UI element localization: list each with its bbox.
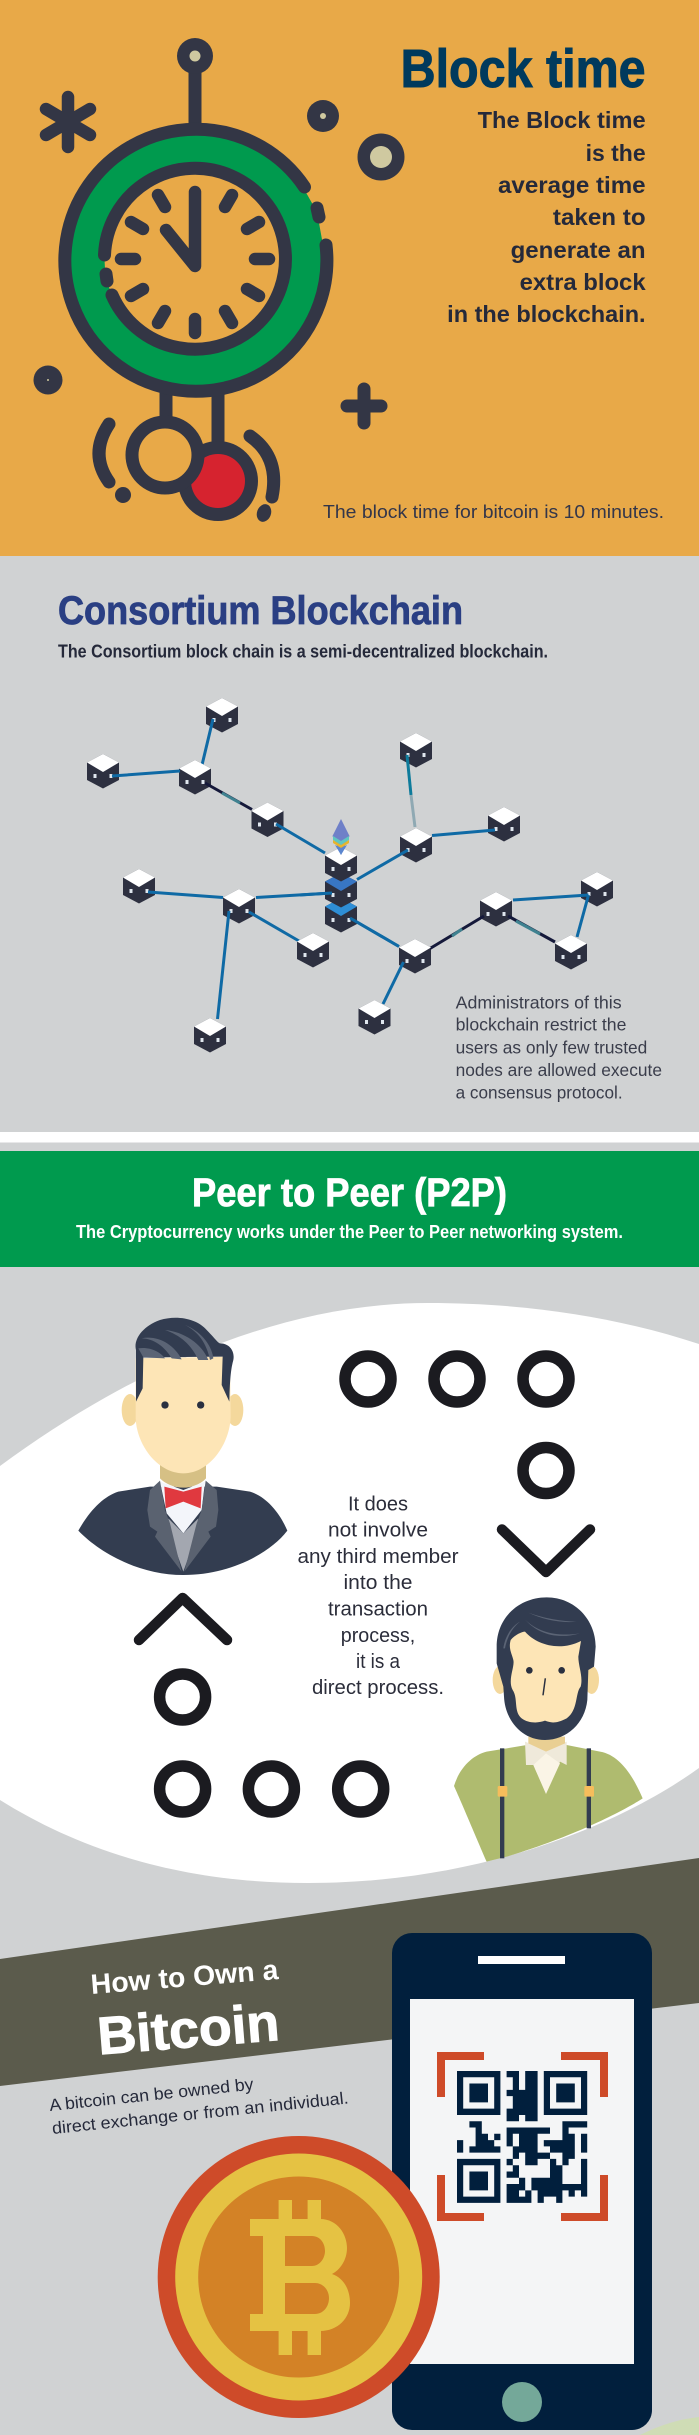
pendulum stems bbox=[166, 392, 218, 450]
flow: circles and chevrons bbox=[139, 1356, 590, 1812]
white divider bbox=[0, 1132, 699, 1142]
icon: asterisk bbox=[46, 97, 90, 147]
clock face bbox=[104, 168, 286, 350]
icon: large ring bbox=[358, 134, 404, 180]
text: block time definition: is the bbox=[586, 140, 646, 166]
pendulum weight red bbox=[178, 441, 258, 521]
text: no third member: any third member bbox=[298, 1546, 459, 1568]
text: block time definition bbox=[447, 107, 646, 327]
icon: left dot ring bbox=[34, 366, 62, 394]
heading: block time: Block time bbox=[401, 39, 646, 99]
icon: phone bbox=[392, 1933, 652, 2430]
heading: peer to peer: Peer to Peer (P2P) bbox=[192, 1171, 507, 1215]
outer ring fragment bbox=[317, 208, 319, 217]
text: no third member: not involve bbox=[328, 1520, 428, 1542]
text: how to own: direct exchange or from an individual. bbox=[51, 2088, 349, 2138]
icon: ethereum diamond bbox=[332, 819, 350, 855]
heading: bitcoin: Bitcoin bbox=[95, 1993, 281, 2066]
outer ring bbox=[65, 129, 327, 391]
text: how to own: A bitcoin can be owned by bbox=[48, 2075, 255, 2115]
text: no third member: direct process. bbox=[312, 1677, 444, 1699]
text: administrators note: Administrators of this bbox=[456, 992, 622, 1012]
text: administrators note: nodes are allowed execute bbox=[456, 1060, 662, 1080]
qr scan corners bbox=[437, 2052, 608, 2221]
icon: small ring bbox=[307, 100, 339, 132]
phone speaker bbox=[478, 1956, 565, 1964]
heading: consortium blockchain: Consortium Blockchain bbox=[58, 589, 463, 633]
text: bitcoin block time: The block time for bitcoin is 10 minutes. bbox=[323, 501, 664, 522]
icon: plus bbox=[347, 389, 381, 423]
white swoosh background bbox=[0, 1303, 699, 1883]
text: consortium subtitle: The Consortium block chain is a semi-decentralized blockchain. bbox=[58, 642, 548, 662]
clock hands bbox=[166, 192, 195, 266]
text: administrators note: users as only few trusted bbox=[456, 1038, 647, 1058]
header band: p2p bbox=[0, 1151, 699, 1267]
text: administrators note: blockchain restrict the bbox=[456, 1015, 626, 1035]
text: no third member: process, bbox=[341, 1625, 415, 1647]
panel: block time bbox=[0, 0, 699, 556]
diagonal band bbox=[0, 1858, 699, 2086]
text: no third member bbox=[298, 1494, 459, 1699]
network diagram bbox=[87, 698, 613, 1052]
phone screen bbox=[410, 1999, 634, 2364]
node cube tops bbox=[87, 698, 613, 1036]
heading: how to own a: How to Own a bbox=[89, 1954, 280, 2000]
panel: peer to peer bbox=[0, 1142, 699, 2435]
text: no third member: into the bbox=[344, 1572, 412, 1594]
text: administrators note bbox=[456, 992, 662, 1102]
bitcoin symbol bbox=[250, 2200, 350, 2355]
text: block time definition: The Block time bbox=[478, 107, 646, 133]
central block stack bbox=[300, 847, 399, 946]
panel: how to own a bitcoin bbox=[0, 1858, 699, 2435]
pendulum ring bbox=[132, 422, 198, 488]
icon: clock bbox=[65, 38, 327, 524]
person: businessman bbox=[78, 1318, 287, 1575]
phone home button bbox=[502, 2382, 542, 2422]
person: bearded man bbox=[454, 1597, 643, 1862]
node cube bodies bbox=[87, 698, 613, 1052]
clock ticks bbox=[121, 195, 269, 333]
icon: bitcoin coin bbox=[158, 2136, 440, 2418]
text: no third member: It does bbox=[348, 1494, 408, 1516]
text: no third member: it is a bbox=[356, 1651, 401, 1673]
panel: consortium blockchain bbox=[0, 556, 699, 1132]
text: block time definition: generate an bbox=[511, 237, 646, 263]
text: block time definition: extra block bbox=[520, 269, 646, 295]
text: block time definition: taken to bbox=[553, 204, 646, 230]
green clock band bbox=[66, 130, 324, 388]
connection lines bbox=[112, 719, 588, 1019]
corner accent bbox=[640, 2417, 699, 2435]
inner ring fragment bbox=[106, 274, 107, 281]
clock top knob bbox=[177, 38, 213, 124]
motion arcs bbox=[99, 424, 274, 524]
qr code bbox=[457, 2071, 587, 2203]
text: p2p subtitle: The Cryptocurrency works under the Peer to Peer networking system. bbox=[76, 1221, 623, 1242]
text: administrators note: a consensus protocol. bbox=[456, 1082, 623, 1102]
text: block time definition: average time bbox=[498, 172, 646, 198]
text: no third member: transaction bbox=[328, 1599, 428, 1621]
text: block time definition: in the blockchain. bbox=[447, 301, 646, 327]
inner ring bbox=[104, 168, 285, 349]
